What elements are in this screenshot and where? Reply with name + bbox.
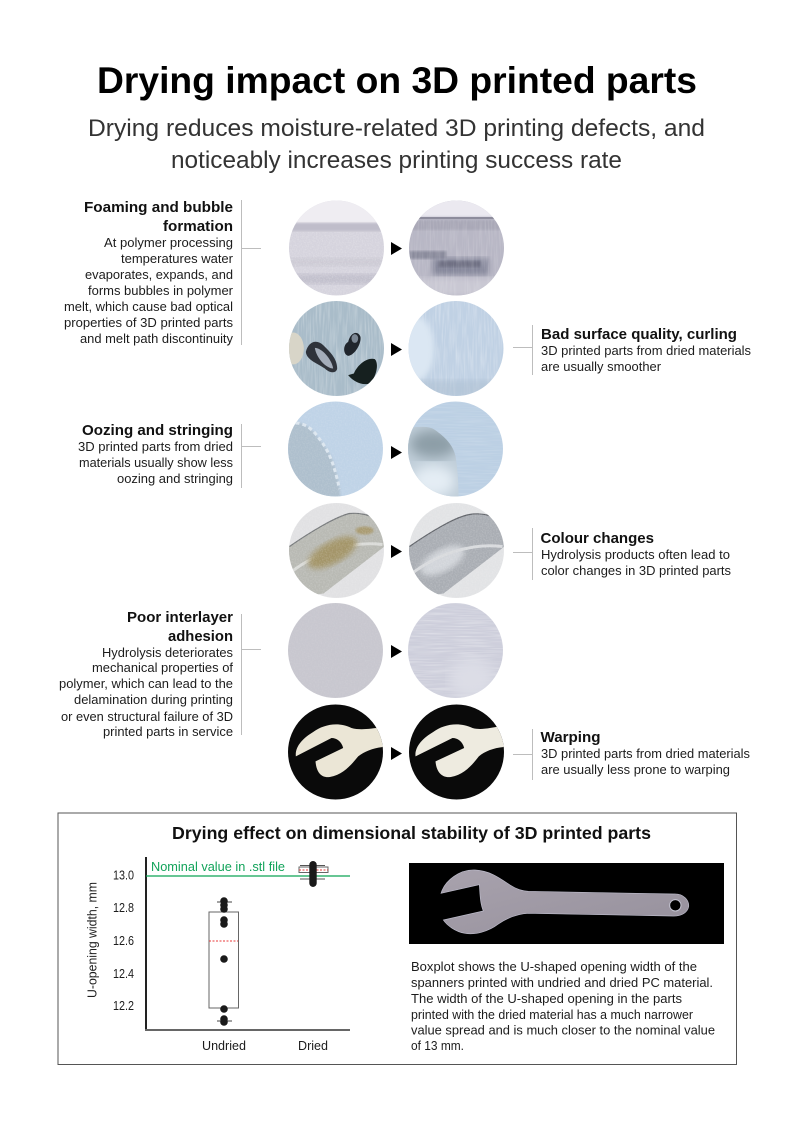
panel: dimensional stability [58, 813, 736, 1064]
photo: warping dried [408, 704, 504, 800]
title: Drying impact on 3D printed parts [97, 60, 697, 101]
body text: foaming [64, 235, 234, 346]
subtitle: Drying reduces moisture-related 3D printing defects, and [88, 115, 705, 142]
photo: adhesion undried [288, 602, 384, 698]
heading: surface: Bad surface quality, curling [541, 326, 737, 343]
panel heading: Drying effect on dimensional stability of 3D printed parts [172, 823, 651, 843]
body text: foaming: and melt path discontinuity [80, 331, 233, 346]
heading: adhesion [127, 609, 233, 645]
annotation: foaming and bubble formation [64, 199, 261, 346]
arrow: colour [391, 545, 402, 558]
nominal value label: Nominal value in .stl file [151, 859, 285, 874]
body text: warping [541, 746, 750, 777]
body text: colour [541, 547, 731, 578]
x axis labels: Undried [202, 1038, 246, 1053]
body text: surface: are usually smoother [541, 359, 662, 374]
y axis ticks [113, 868, 134, 1013]
body text: foaming: At polymer processing [104, 235, 233, 250]
heading: oozing: Oozing and stringing [82, 422, 233, 439]
photo: foaming undried [288, 198, 384, 296]
axes [145, 857, 147, 1030]
photo: surface dried [408, 301, 504, 396]
heading: foaming: Foaming and bubble [84, 199, 233, 216]
photo: colour undried [288, 502, 384, 598]
y axis ticks: 13.0 [113, 868, 134, 882]
heading: foaming [84, 199, 233, 235]
description text: spanners printed with undried and dried PC material. [411, 975, 713, 990]
nominal value line [146, 875, 350, 877]
arrow: surface [391, 343, 402, 356]
heading: foaming: formation [163, 218, 233, 235]
y axis ticks: 12.6 [113, 933, 134, 948]
box: undried [209, 897, 238, 1026]
photo: foaming dried [408, 198, 504, 296]
description text: Boxplot shows the U-shaped opening width of the [411, 959, 697, 974]
photo: surface undried [283, 300, 384, 396]
subtitle: noticeably increases printing success rate [171, 147, 622, 174]
x axis labels [202, 1038, 328, 1053]
photo: colour dried [408, 502, 504, 598]
photo: spanner [409, 863, 724, 944]
y axis label: U-opening width, mm [84, 882, 100, 998]
box: dried [299, 861, 328, 887]
annotation: poor interlayer adhesion [59, 609, 261, 739]
description text: The width of the U-shaped opening in the parts [411, 991, 682, 1006]
body text: foaming: forms bubbles in polymer [88, 283, 234, 298]
body text: foaming: melt, which cause bad optical [64, 299, 233, 314]
photo: adhesion dried [408, 602, 504, 698]
heading: adhesion: Poor interlayer [127, 609, 233, 626]
arrow: adhesion [391, 645, 402, 658]
photo: oozing undried [288, 401, 384, 497]
heading: warping: Warping [540, 729, 600, 746]
description text: printed with the dried material has a much narrower [411, 1007, 694, 1022]
body text: foaming: properties of 3D printed parts [64, 315, 233, 330]
description text: of 13 mm. [411, 1038, 464, 1053]
body text: surface: 3D printed parts from dried materials [541, 343, 751, 358]
x axis labels: Dried [298, 1038, 328, 1053]
body text: oozing [78, 439, 233, 486]
annotation: bad surface quality [513, 325, 751, 375]
body text: adhesion: polymer, which can lead to the [59, 676, 233, 691]
annotation: colour changes [513, 528, 731, 580]
arrow: foaming [391, 242, 402, 255]
body text: adhesion: or even structural failure of 3D [61, 709, 233, 724]
arrow: oozing [391, 446, 402, 459]
subtitle [88, 115, 705, 174]
body text: surface [541, 343, 751, 374]
body text: adhesion: mechanical properties of [92, 660, 233, 675]
body text: adhesion [59, 645, 233, 739]
y axis ticks: 12.2 [113, 998, 134, 1013]
photo: oozing dried [408, 401, 504, 497]
body text: warping: 3D printed parts from dried materials [541, 746, 750, 761]
description text: value spread and is much closer to the nominal value [411, 1022, 715, 1038]
body text: adhesion: Hydrolysis deteriorates [102, 645, 233, 660]
photo: warping undried [288, 704, 384, 800]
body text: colour: color changes in 3D printed parts [541, 563, 731, 578]
annotation: oozing and stringing [78, 422, 261, 488]
body text: warping: are usually less prone to warping [541, 762, 730, 777]
description text [411, 959, 715, 1053]
body text: adhesion: printed parts in service [103, 724, 233, 739]
heading: adhesion: adhesion [168, 628, 233, 645]
arrow: warping [391, 747, 402, 760]
boxplot chart [84, 857, 350, 1053]
body text: oozing: materials usually show less [79, 455, 233, 470]
y axis ticks: 12.4 [113, 966, 134, 981]
body text: foaming: evaporates, expands, and [85, 267, 233, 282]
body text: foaming: temperatures water [121, 251, 234, 266]
annotation: warping [513, 729, 750, 780]
body text: oozing: 3D printed parts from dried [78, 439, 233, 454]
y axis ticks: 12.8 [113, 900, 134, 915]
body text: colour: Hydrolysis products often lead to [541, 547, 730, 562]
heading: colour: Colour changes [540, 530, 654, 547]
body text: adhesion: delamination during printing [74, 692, 233, 707]
body text: oozing: oozing and stringing [117, 471, 233, 486]
